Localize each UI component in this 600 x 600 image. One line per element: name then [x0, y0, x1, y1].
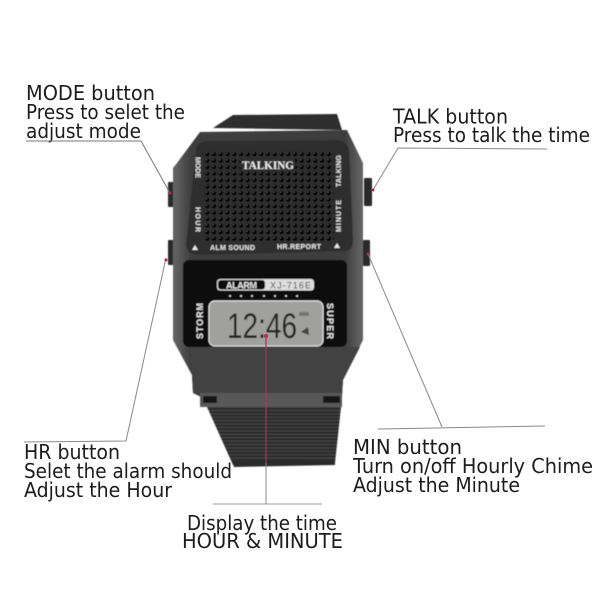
label: MIN button [352, 252, 593, 497]
watch [168, 114, 372, 467]
strap: top [213, 114, 342, 130]
leader: display [213, 334, 322, 504]
leader: MODE [26, 141, 172, 194]
label: display the time: HOUR & MINUTE [182, 529, 343, 553]
label: MIN button: MIN button [353, 435, 462, 459]
label: MIN button: Adjust the Minute [353, 473, 520, 497]
time digits: 12:46 [227, 307, 297, 346]
alarm badge: XJ-716E [270, 280, 311, 290]
label: MODE button: adjust mode [26, 119, 141, 143]
label: display the time [182, 334, 343, 553]
speaker panel [186, 140, 353, 255]
speaker labels: MODE [194, 157, 200, 178]
speaker labels: HR.REPORT [277, 244, 322, 251]
speaker labels: MINUTE [336, 200, 343, 232]
display panel [183, 260, 347, 347]
indicator dots [229, 295, 298, 297]
alarm badge: ALARM [226, 280, 257, 290]
label: HR button: Selet the alarm should [24, 459, 232, 483]
leader: TALK [372, 148, 547, 192]
label: TALK button: TALK button [392, 104, 508, 128]
label: MODE button: MODE button [26, 81, 155, 105]
watch case [173, 130, 363, 398]
speaker labels: ALM SOUND [210, 245, 255, 252]
leader: MIN [366, 252, 545, 429]
label: HR button: HR button [24, 440, 120, 464]
TALKING heading: TALKING [242, 158, 294, 172]
side labels: SUPER [325, 303, 335, 340]
LCD icons [299, 312, 309, 335]
side labels: STORM [195, 303, 205, 339]
lower case shading [190, 347, 360, 393]
LCD screen [209, 301, 323, 346]
label: display the time: Display the time [187, 511, 337, 535]
strap: bottom ribbed [203, 398, 342, 467]
strap lugs [203, 396, 340, 403]
label: TALK button [372, 104, 590, 192]
label: HR button [24, 258, 232, 502]
leader: HR [24, 258, 168, 442]
side buttons [168, 178, 372, 266]
speaker labels [192, 154, 343, 252]
label: MODE button: Press to selet the [26, 100, 185, 124]
alarm badge [217, 279, 314, 290]
label: MODE button [26, 81, 185, 194]
speaker labels: HOUR [194, 207, 200, 232]
speaker labels: TALKING [336, 154, 343, 187]
side labels [195, 303, 335, 340]
label: HR button: Adjust the Hour [24, 478, 173, 502]
